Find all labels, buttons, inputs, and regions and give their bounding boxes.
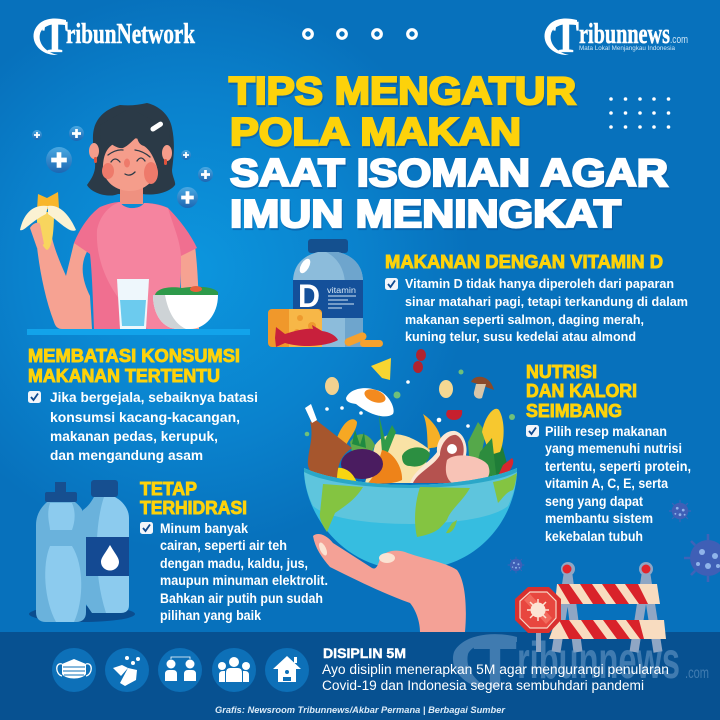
- heading: [140, 479, 247, 518]
- ears: [89, 143, 172, 161]
- earrings: [94, 157, 167, 165]
- banana: [20, 192, 76, 250]
- bowl light band: [304, 468, 517, 524]
- shirt: [74, 202, 197, 329]
- illustration: road barricade: [515, 562, 666, 652]
- sign post: [536, 630, 541, 652]
- checkbox: [140, 522, 153, 534]
- logo: Tribun Network: [34, 11, 195, 62]
- body text: Minum banyak: [160, 521, 248, 536]
- icons: virus particles: [508, 500, 720, 582]
- plus badges: [32, 126, 213, 208]
- watermark: T: [473, 627, 517, 703]
- heading: [28, 346, 240, 386]
- checkbox: [28, 391, 41, 403]
- heading: SEIMBANG: [526, 401, 622, 421]
- dot grid: [609, 97, 670, 129]
- body text: membantu sistem: [545, 511, 653, 526]
- fish: [275, 325, 338, 347]
- face: [103, 138, 157, 191]
- checkbox: [385, 278, 398, 290]
- glass of water: [117, 279, 149, 329]
- title: POLA MAKAN: [230, 111, 521, 154]
- icon: house: [265, 648, 309, 692]
- body text: cairan, seperti air teh: [160, 538, 287, 553]
- body text: kekebalan tubuh: [545, 529, 643, 544]
- facial features: [108, 150, 150, 175]
- title: IMUN MENINGKAT: [231, 195, 622, 238]
- body text: pilihan yang baik: [160, 608, 261, 623]
- illustration: water bottles: [29, 480, 135, 622]
- body text: [545, 424, 691, 544]
- hair clip: [149, 121, 164, 132]
- label text: vitamin: [327, 286, 356, 295]
- nose: [124, 158, 130, 168]
- pills: [343, 331, 383, 347]
- body text: maupun minuman elektrolit.: [160, 573, 328, 588]
- logo: Tribunnews: .com: [670, 34, 688, 46]
- heading: TERHIDRASI: [140, 498, 247, 518]
- heading: DAN KALORI: [526, 381, 637, 401]
- section: Tetap terhidrasi: [140, 479, 328, 623]
- body text: [160, 521, 328, 623]
- logo: Tribunnews: Mata Lokal Menjangkau Indonesia: [579, 45, 675, 52]
- icon: distance: [158, 648, 202, 692]
- illustration: woman eating: [20, 103, 250, 335]
- body text: Bahkan air putih pun sudah: [160, 591, 323, 606]
- title: SAAT ISOMAN AGAR: [231, 154, 669, 197]
- title: TIPS MENGATUR: [230, 72, 577, 115]
- fringe: [100, 108, 170, 170]
- body text: dan mengandung asam: [50, 448, 203, 463]
- heading: MEMBATASI KONSUMSI: [28, 346, 240, 366]
- body text: dengan madu, kaldu, jus,: [160, 556, 308, 571]
- checkbox: [526, 425, 539, 437]
- body text: makanan seperti salmon, daging merah,: [405, 312, 644, 327]
- posts: [556, 575, 658, 652]
- body text: yang memenuhi nutrisi: [545, 441, 682, 456]
- body text: Vitamin D tidak hanya diperoleh dari paparan: [405, 276, 674, 291]
- bottle cap: [308, 239, 348, 253]
- text: disiplin 5M: Ayo disiplin menerapkan 5M agar mengurangi penularan: [322, 662, 669, 677]
- title: [229, 70, 669, 238]
- logo: Tribunnews: T: [553, 11, 579, 62]
- logo: Tribunnews: [545, 11, 688, 62]
- water drop icon: [101, 545, 119, 570]
- watermark: .com: [685, 665, 709, 682]
- foods in bowl: [305, 404, 513, 484]
- heading: NUTRISI: [526, 362, 597, 382]
- knobs: [561, 562, 653, 576]
- text: disiplin 5M: Covid-19 dan Indonesia segera sembuhdari pandemi: [322, 678, 644, 693]
- salad bowl: [153, 286, 218, 329]
- heading: MAKANAN TERTENTU: [28, 366, 220, 386]
- logo: Tribun Network: ribunNetwork: [66, 19, 195, 50]
- left bottle: [36, 482, 86, 622]
- bottle highlight: [298, 257, 312, 275]
- watermark: [453, 627, 709, 703]
- other arm: [180, 246, 199, 329]
- heading: MAKANAN DENGAN VITAMIN D: [385, 252, 663, 272]
- credit line: Grafis: Newsroom Tribunnews/Akbar Permana | Berbagai Sumber: [215, 705, 506, 716]
- title: SAAT ISOMAN AGAR: [230, 152, 668, 195]
- title: POLA MAKAN: [231, 113, 522, 156]
- text: disiplin 5M: DISIPLIN 5M: [323, 646, 406, 661]
- text: disiplin 5M: [322, 646, 669, 693]
- label lines: [328, 296, 356, 308]
- body text: [405, 276, 688, 344]
- body text: Jika bergejala, sebaiknya batasi: [50, 390, 258, 405]
- bowl: [304, 468, 517, 570]
- icon: crowd: [212, 648, 256, 692]
- icon: washing hands: [105, 648, 149, 692]
- body text: Pilih resep makanan: [545, 424, 667, 439]
- label letter D: D: [298, 278, 320, 314]
- title: IMUN MENINGKAT: [230, 193, 621, 236]
- heading: TETAP: [140, 479, 197, 499]
- section: Nutrisi dan kalori seimbang: [526, 362, 691, 544]
- hand: [313, 534, 466, 632]
- floating foods: [305, 349, 515, 436]
- body text: tertentu, seperti protein,: [545, 459, 691, 474]
- bowl rim: [304, 468, 517, 488]
- body text: makanan pedas, kerupuk,: [50, 429, 218, 444]
- illustration: food bowl on hand: [304, 349, 517, 632]
- bottle label: [293, 280, 363, 318]
- body text: sinar matahari pagi, tetapi terkandung di dalam: [405, 294, 688, 309]
- icons: 5M row: [52, 648, 309, 692]
- title: TIPS MENGATUR: [229, 70, 576, 113]
- hair: [87, 103, 175, 196]
- body text: seng yang dapat: [545, 494, 643, 509]
- bottle body: [293, 252, 363, 347]
- body text: kuning telur, susu kedelai atau almond: [405, 329, 636, 344]
- icon: mask: [52, 648, 96, 692]
- continents: [320, 473, 517, 537]
- arm: [36, 226, 92, 329]
- panel: bottom band: [0, 632, 720, 720]
- body text: [50, 390, 258, 463]
- body text: konsumsi kacang-kacangan,: [50, 410, 240, 425]
- illustration: vitamin D bottle with food: [268, 239, 383, 347]
- table: [27, 329, 250, 335]
- section: Makanan dengan vitamin D: [385, 252, 688, 344]
- top board: [555, 584, 660, 604]
- section: Membatasi konsumsi: [28, 346, 258, 463]
- right bottle: [83, 480, 129, 613]
- stop sign: [515, 587, 561, 633]
- logo: Tribunnews: ribunnews: [579, 19, 670, 50]
- heading: [526, 362, 637, 421]
- cheese: [268, 309, 322, 347]
- logo: Tribun Network: T: [42, 11, 68, 62]
- shadow: [29, 606, 135, 622]
- decorative pager dots: [304, 30, 416, 38]
- body text: vitamin A, C, E, serta: [545, 476, 668, 491]
- neck: [120, 186, 143, 204]
- bottom board: [549, 620, 666, 639]
- fingernails: [317, 541, 395, 563]
